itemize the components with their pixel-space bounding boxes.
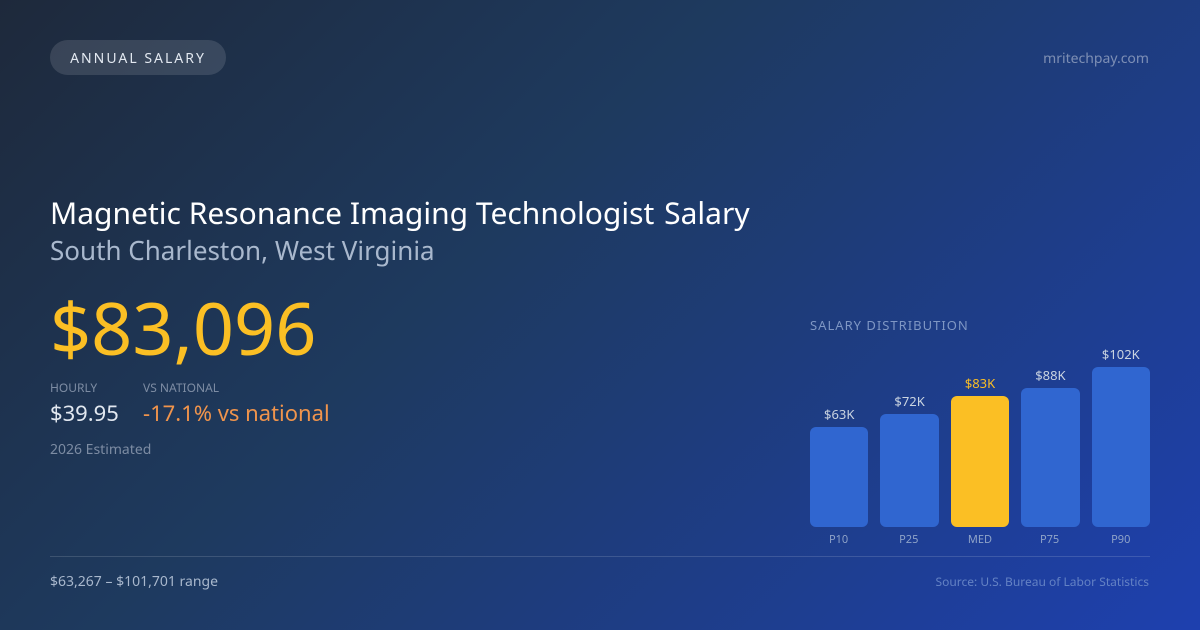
salary range: $63,267 – $101,701 range	[50, 572, 218, 591]
badge: annual salary: ANNUAL SALARY	[70, 49, 206, 68]
source note: Source: U.S. Bureau of Labor Statistics	[936, 573, 1149, 590]
bar: P25: P25	[899, 532, 918, 547]
bar: P10	[810, 405, 868, 547]
badge: annual salary	[50, 40, 226, 75]
site domain: mritechpay.com	[1043, 49, 1149, 68]
bar chart: salary distribution	[810, 345, 1150, 547]
bar: median	[951, 374, 1009, 547]
versus national value: -17.1% vs national	[143, 398, 330, 428]
versus national label: VS NATIONAL	[143, 379, 219, 396]
hourly label: HOURLY	[50, 379, 97, 396]
stat: hourly	[50, 379, 119, 428]
bar: median: $83K	[965, 374, 995, 392]
bar: P10: $63K	[824, 405, 854, 423]
headline salary: $83,096	[50, 279, 316, 377]
bar: P75: $88K	[1035, 366, 1066, 384]
chart heading: SALARY DISTRIBUTION	[810, 316, 969, 334]
bar: P25	[880, 392, 939, 547]
bar: P75	[1021, 366, 1080, 547]
subtitle: location: South Charleston, West Virginia	[50, 232, 435, 268]
stat: versus national	[143, 379, 330, 428]
bar: P10: P10	[829, 532, 848, 547]
hourly value: $39.95	[50, 398, 119, 428]
bar: P90: $102K	[1102, 345, 1140, 363]
bar: P25: $72K	[894, 392, 925, 410]
title: Magnetic Resonance Imaging Technologist Salary	[50, 192, 750, 233]
bar: P90: P90	[1111, 532, 1130, 547]
estimate note: 2026 Estimated	[50, 440, 151, 459]
bar: P75: P75	[1040, 532, 1059, 547]
bar: P90	[1092, 345, 1150, 547]
bar: median: MED	[968, 532, 992, 547]
